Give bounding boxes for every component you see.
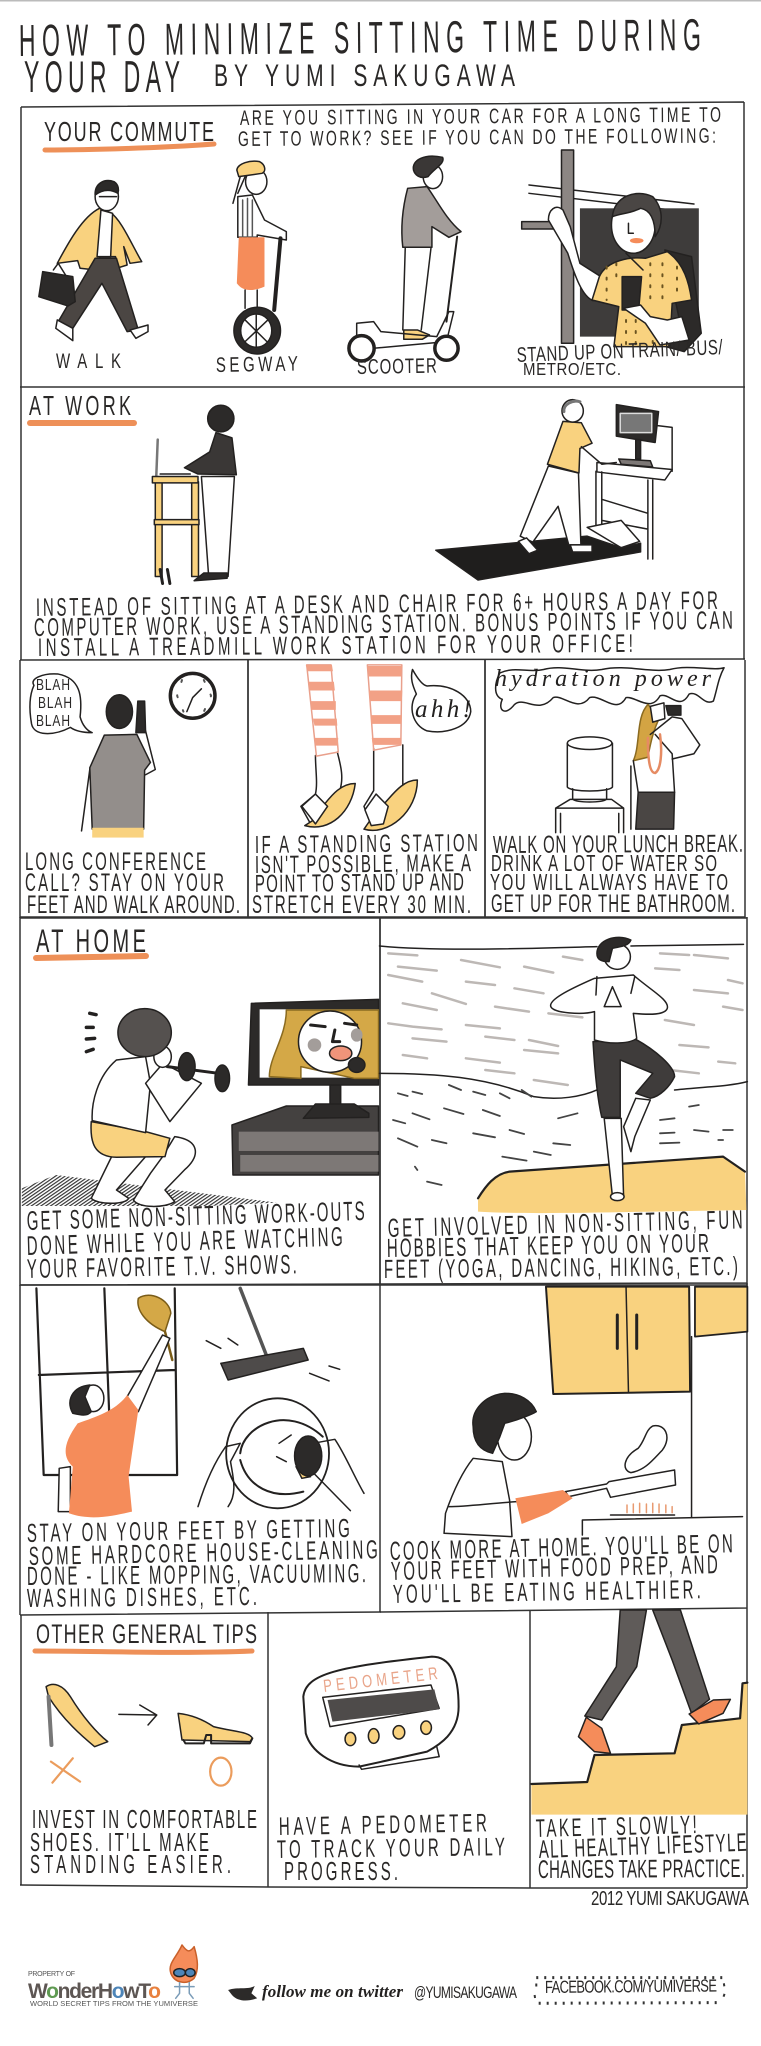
illustration: pedometer (303, 1657, 459, 1769)
title: HOW TO MINIMIZE SITTING TIME DURING (19, 10, 701, 66)
logo: wonderhowto: WonderHowTo (28, 1980, 161, 2003)
labels: transport options: SCOOTER (357, 353, 437, 379)
illustration: kitchen cabinets (546, 1287, 747, 1517)
title: YOUR DAY (24, 52, 180, 102)
heading: at home: AT HOME (36, 923, 146, 959)
text: pedometer (277, 1809, 505, 1886)
text: conference call (25, 848, 240, 919)
text: conference call: FEET AND WALK AROUND. (27, 891, 240, 919)
logo: wonderhowto (28, 1945, 198, 2008)
title (19, 10, 701, 102)
panel: house cleaning (20, 1285, 381, 1615)
speech: ahh: ahh! (415, 696, 471, 723)
text: hydration: WALK ON YOUR LUNCH BREAK. (493, 830, 743, 859)
text: stand and stretch: POINT TO STAND UP AND (255, 868, 464, 898)
illustration: scooter rider (349, 156, 461, 361)
panel: at work (20, 387, 745, 662)
twitter line (228, 1982, 517, 2003)
illustration: striped legs (301, 665, 471, 830)
text: pedometer: PROGRESS. (284, 1858, 398, 1886)
speech: blah blah blah (36, 675, 72, 729)
intro text: ARE YOU SITTING IN YOUR CAR FOR A LONG TIME TO (240, 103, 721, 130)
illustration: tv and cabinet (232, 999, 379, 1175)
illustration: segway rider (233, 161, 286, 354)
text: conference call: CALL? STAY ON YOUR (25, 869, 224, 897)
intro text (238, 103, 721, 151)
text: pedometer: HAVE A PEDOMETER (279, 1809, 487, 1841)
heading: your commute: YOUR COMMUTE (44, 116, 214, 147)
text: conference call: LONG CONFERENCE (25, 848, 206, 876)
text: workouts (26, 1195, 365, 1284)
panel: at home workout (20, 917, 380, 1285)
text: workouts: YOUR FAVORITE T.V. SHOWS. (27, 1249, 297, 1284)
text: stand and stretch: ISN'T POSSIBLE, MAKE A (255, 849, 471, 879)
text: at work (34, 587, 733, 662)
text: house cleaning: DONE - LIKE MOPPING, VACUUMING. (27, 1559, 366, 1591)
logo: wonderhowto: WORLD SECRET TIPS FROM THE YUMIVERSE (30, 1999, 198, 2008)
text: at work: INSTALL A TREADMILL WORK STATION FOR YOUR OFFICE! (38, 630, 633, 662)
illustration: standing desk (152, 405, 236, 584)
panel: pedometer (268, 1610, 530, 1888)
labels: transport options (56, 335, 724, 379)
panel: stand and stretch (248, 660, 485, 919)
text: stand and stretch: STRETCH EVERY 30 MIN. (252, 891, 471, 919)
text: pedometer: TO TRACK YOUR DAILY (277, 1833, 505, 1864)
facebook badge: FACEBOOK.COM/YUMIVERSE (545, 1977, 717, 1998)
text: hydration: GET UP FOR THE BATHROOM. (491, 890, 735, 918)
heading: other general tips: OTHER GENERAL TIPS (36, 1618, 257, 1649)
illustration: yoga on the beach (380, 937, 747, 1213)
text: hydration: YOU WILL ALWAYS HAVE TO (490, 870, 728, 896)
text: stand and stretch: IF A STANDING STATION (255, 829, 478, 859)
text: hobbies: HOBBIES THAT KEEP YOU ON YOUR (387, 1229, 709, 1263)
labels: transport options: METRO/ETC. (523, 359, 621, 379)
credit: 2012 yumi sakugawa: 2012 YUMI SAKUGAWA (591, 1887, 749, 1910)
text: hobbies: FEET (YOGA, DANCING, HIKING, ETC.) (384, 1252, 738, 1284)
panel: conference call (20, 660, 248, 919)
speech: blah blah blah: BLAH (38, 693, 72, 711)
text: take it slowly: CHANGES TAKE PRACTICE. (538, 1855, 745, 1884)
icon: bird (228, 1986, 257, 2000)
text: shoes: SHOES. IT'LL MAKE (30, 1829, 209, 1857)
title: BY YUMI SAKUGAWA (214, 58, 515, 93)
illustration: hydration cloud and water cooler (496, 667, 724, 833)
illustration: standing on train (522, 150, 701, 352)
text: take it slowly: ALL HEALTHY LIFESTYLE (538, 1829, 747, 1864)
text: cook more (389, 1529, 733, 1609)
twitter line: @YUMISAKUGAWA (414, 1984, 517, 2003)
text: take it slowly: TAKE IT SLOWLY! (535, 1811, 697, 1843)
text: at work: COMPUTER WORK, USE A STANDING STATION. BONUS POINTS IF YOU CAN (34, 607, 733, 642)
illustration: squatting with dumbbell (22, 1009, 277, 1206)
panel: hydration (485, 660, 745, 918)
text: house cleaning: STAY ON YOUR FEET BY GETTING (27, 1514, 350, 1548)
text: shoes (30, 1806, 257, 1879)
text: hobbies (384, 1205, 743, 1284)
panel: take it slowly (530, 1608, 747, 1888)
labels: transport options: STAND UP ON TRAIN/ BUS/ (516, 335, 724, 367)
text: workouts: DONE WHILE YOU ARE WATCHING (26, 1221, 343, 1261)
panel: yoga hobbies (20, 917, 747, 1285)
intro text: GET TO WORK? SEE IF YOU CAN DO THE FOLLOWING: (238, 124, 716, 151)
illustration: washing dish (198, 1398, 364, 1511)
text: house cleaning: WASHING DISHES, ETC. (27, 1582, 257, 1613)
twitter line: follow me on twitter (262, 1982, 403, 2001)
pedometer label: PEDOMETER (322, 1664, 439, 1697)
facebook badge (534, 1977, 729, 2003)
speech: blah blah blah: BLAH (36, 711, 70, 729)
text: stand and stretch (252, 829, 478, 919)
text: house cleaning: SOME HARDCORE HOUSE-CLEANING (29, 1535, 378, 1571)
icon: flame mascot (170, 1945, 197, 1998)
illustration: walker (39, 181, 148, 341)
speech: blah blah blah: BLAH (36, 675, 70, 693)
illustration: cooking a pancake (444, 1393, 743, 1537)
panel: comfortable shoes (20, 1612, 268, 1887)
text: cook more: COOK MORE AT HOME. YOU'LL BE ON (389, 1529, 733, 1566)
labels: transport options: SEGWAY (216, 351, 298, 377)
text: hydration: DRINK A LOT OF WATER SO (491, 851, 717, 877)
text: hydration (490, 830, 743, 918)
illustration: walking up stairs (531, 1610, 747, 1815)
text: cook more: YOU'LL BE EATING HEALTHIER. (393, 1575, 701, 1609)
text: house cleaning (27, 1514, 378, 1613)
illustration: mop (206, 1288, 340, 1381)
text: cook more: YOUR FEET WITH FOOD PREP, AND (391, 1550, 718, 1586)
text: workouts: GET SOME NON-SITTING WORK-OUTS (26, 1195, 365, 1236)
labels: transport options: WALK (56, 348, 121, 373)
panel: cook at home (380, 1283, 747, 1612)
text: shoes: INVEST IN COMFORTABLE (32, 1806, 257, 1834)
illustration: man on the phone (30, 673, 215, 838)
heading: at work: AT WORK (29, 390, 131, 421)
hydration label: hydration power (495, 666, 712, 692)
text: shoes: STANDING EASIER. (30, 1851, 231, 1879)
text: at work: INSTEAD OF SITTING AT A DESK AND CHAIR FOR 6+ HOURS A DAY FOR (36, 587, 718, 622)
text: take it slowly (535, 1811, 747, 1884)
illustration: treadmill workstation (436, 400, 672, 580)
text: hobbies: GET INVOLVED IN NON-SITTING, FUN (387, 1205, 743, 1243)
illustration: dusting window (36, 1288, 177, 1517)
panel: your commute (20, 102, 745, 387)
logo: wonderhowto: PROPERTY OF (28, 1971, 75, 1978)
illustration: shoes swap (46, 1684, 252, 1786)
